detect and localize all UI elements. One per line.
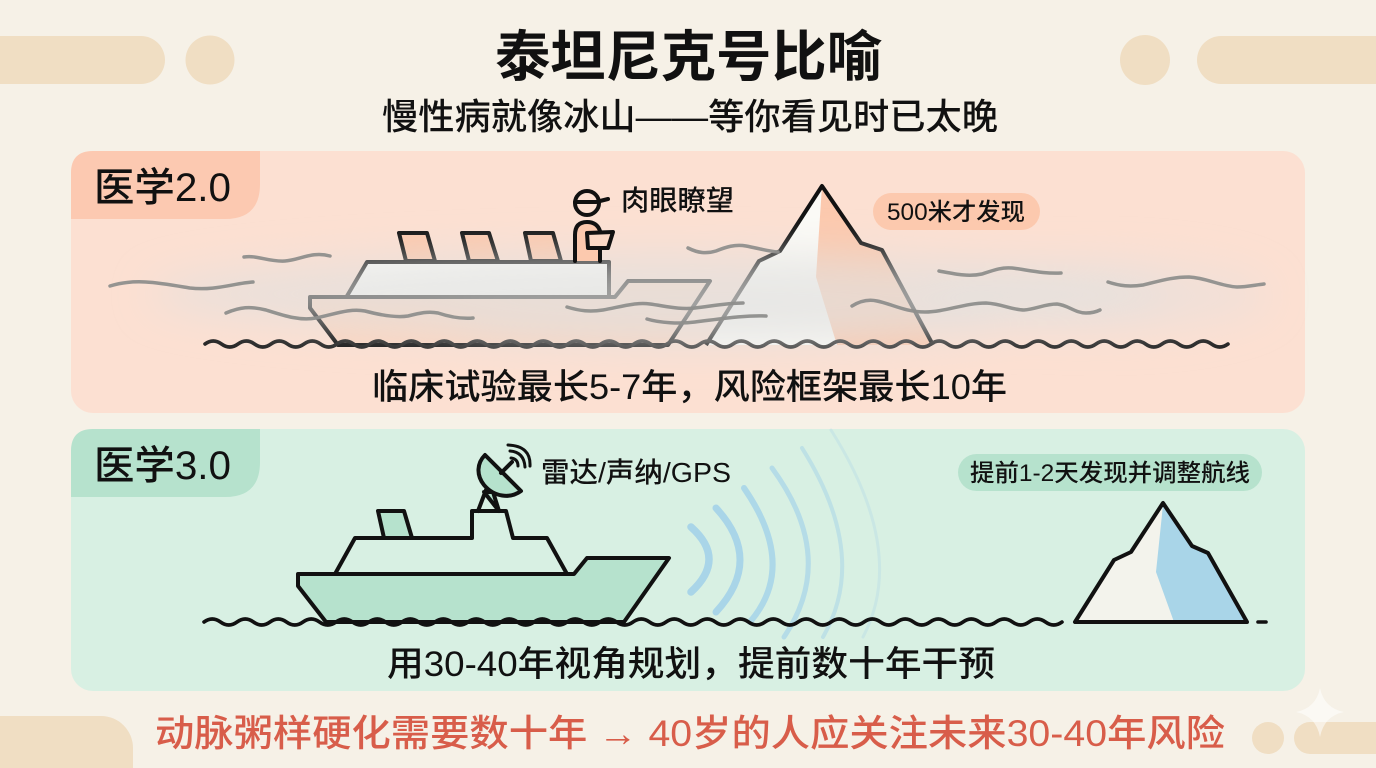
panel: 医学2.0 — [71, 151, 1305, 413]
fog bank — [150, 252, 1270, 352]
caption: 医学3.0: 用30-40年视角规划，提前数十年干预 — [387, 645, 995, 684]
icon: lookout with binoculars — [575, 191, 613, 261]
callout: 500米才发现: 500米才发现 — [887, 199, 1025, 226]
badge: 医学2.0: 医学2.0 — [94, 166, 231, 210]
takeaway: 动脉粥样硬化需要数十年 → 40岁的人应关注未来30-40年风险 — [155, 713, 1225, 754]
ship: fogged cruise ship — [310, 233, 710, 345]
decorative shapes: top left — [0, 36, 234, 84]
panel: 医学3.0 — [71, 429, 1305, 691]
label: 肉眼瞭望: 肉眼瞭望 — [621, 185, 734, 216]
waterline — [205, 341, 1228, 347]
ship: radar-equipped — [298, 511, 669, 622]
subtitle: 慢性病就像冰山——等你看见时已太晚 — [382, 96, 998, 137]
decorative sparkle — [1296, 688, 1344, 737]
icon: radar dish — [478, 445, 530, 511]
title: 泰坦尼克号比喻 — [495, 26, 882, 88]
callout: 提前1-2天发现并调整航线: 提前1-2天发现并调整航线 — [970, 460, 1250, 487]
badge: 医学3.0: 医学3.0 — [94, 444, 231, 488]
callout: 500米才发现 — [873, 193, 1040, 230]
callout: 提前1-2天发现并调整航线 — [958, 454, 1262, 491]
decorative shapes: top right — [1120, 35, 1376, 85]
waterline — [204, 619, 1266, 625]
fog wisps — [110, 245, 1264, 323]
iceberg: close ahead — [706, 186, 933, 345]
radar waves — [691, 430, 880, 637]
decorative shapes: bottom right — [1252, 722, 1376, 754]
caption: 医学2.0: 临床试验最长5-7年，风险框架最长10年 — [372, 368, 1007, 407]
label: 雷达/声纳/GPS: 雷达/声纳/GPS — [541, 457, 731, 488]
decorative shapes: bottom left — [0, 716, 133, 768]
badge: 医学3.0 — [71, 429, 260, 497]
iceberg: far ahead — [1075, 503, 1247, 622]
badge: 医学2.0 — [71, 151, 260, 219]
